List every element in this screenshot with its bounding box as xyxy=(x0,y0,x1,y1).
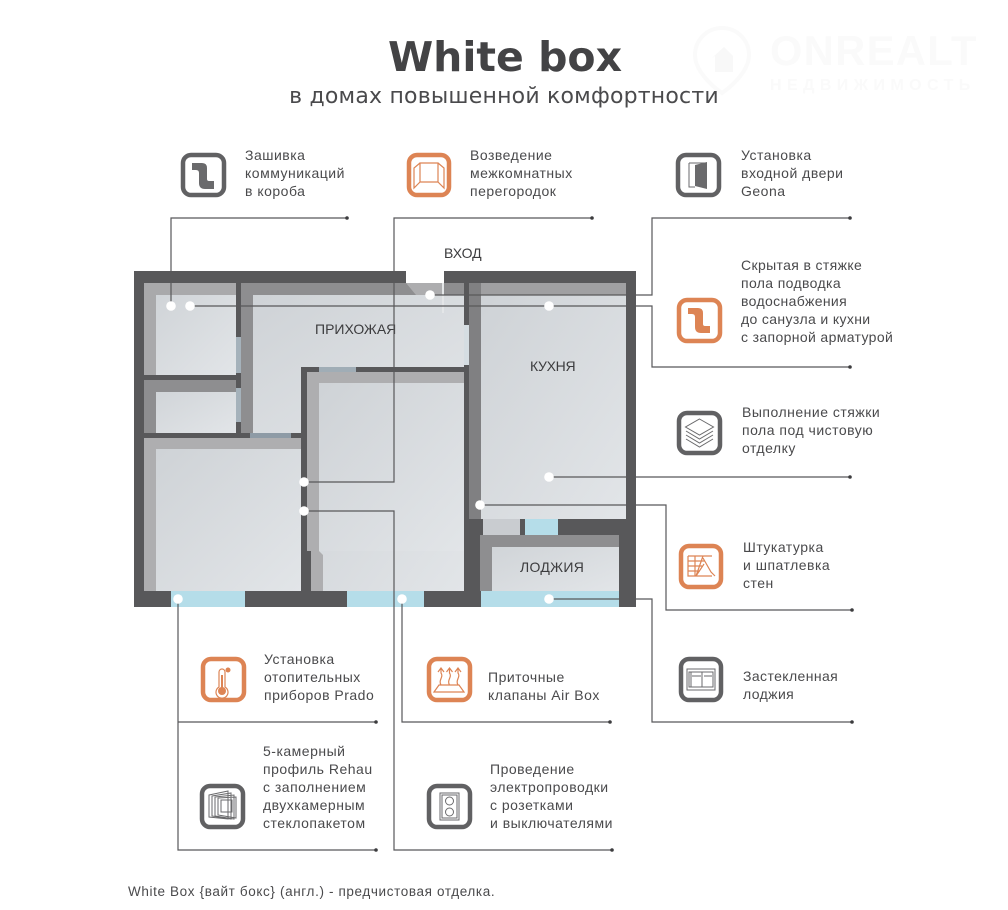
icon: window xyxy=(681,659,721,700)
text: отделку xyxy=(742,440,796,456)
item: water supply xyxy=(679,257,893,345)
text: Приточные xyxy=(488,669,565,685)
icon: socket xyxy=(429,786,470,827)
room: small bathroom xyxy=(144,380,236,433)
room label: hall: ПРИХОЖАЯ xyxy=(315,321,396,337)
text: клапаны Air Box xyxy=(488,687,600,703)
text: лоджия xyxy=(743,686,794,702)
item: boxed utilities xyxy=(183,147,345,199)
icon: plaster trowel xyxy=(681,546,721,587)
text: стен xyxy=(743,575,774,591)
text: Застекленная xyxy=(743,668,838,684)
title: White box xyxy=(388,33,622,81)
item: plaster xyxy=(681,539,830,591)
room label: entrance: ВХОД xyxy=(444,245,482,261)
text: и шпатлевка xyxy=(743,557,830,573)
icon: profile layers xyxy=(202,786,243,827)
text: профиль Rehau xyxy=(263,761,373,777)
text: перегородок xyxy=(470,183,557,199)
item: partitions xyxy=(409,147,573,199)
text: Установка xyxy=(264,651,335,667)
watermark: ONREALT: НЕДВИЖИМОСТЬ xyxy=(770,77,976,94)
watermark: ONREALT xyxy=(695,27,978,94)
icon: door xyxy=(678,155,719,195)
text: 5-камерный xyxy=(263,743,345,759)
item: screed xyxy=(679,404,880,456)
icon: thermometer xyxy=(203,659,244,700)
item: wiring xyxy=(429,761,613,831)
text: Зашивка xyxy=(245,147,305,163)
floor plan xyxy=(134,245,636,607)
text: стеклопакетом xyxy=(263,815,366,831)
room: bedroom xyxy=(144,438,301,591)
item: air valves xyxy=(429,659,600,703)
room label: loggia: ЛОДЖИЯ xyxy=(520,559,584,575)
text: Штукатурка xyxy=(743,539,824,555)
text: приборов Prado xyxy=(264,687,374,703)
text: коммуникаций xyxy=(245,165,345,181)
subtitle: в домах повышенной комфортности xyxy=(289,84,719,109)
room: living room xyxy=(307,372,464,591)
item: window profile xyxy=(202,743,373,831)
text: Установка xyxy=(741,147,812,163)
room label: kitchen: КУХНЯ xyxy=(530,358,575,374)
icon: orange pipe xyxy=(679,300,720,341)
text: Выполнение стяжки xyxy=(742,404,880,420)
footnote: White Box {вайт бокс} (англ.) - предчистовая отделка. xyxy=(128,884,495,899)
text: с розетками xyxy=(490,797,573,813)
text: с заполнением xyxy=(263,779,366,795)
text: Geona xyxy=(741,183,786,199)
room: bathroom xyxy=(144,283,236,375)
text: пола под чистовую xyxy=(742,422,873,438)
text: двухкамерным xyxy=(263,797,365,813)
text: в короба xyxy=(245,183,305,199)
icon: room walls xyxy=(409,155,449,195)
item: entrance door xyxy=(678,147,844,199)
icon: pipe xyxy=(183,155,224,195)
interior doors and glass xyxy=(171,325,619,607)
text: межкомнатных xyxy=(470,165,573,181)
room: loggia xyxy=(480,535,619,591)
text: пола подводка xyxy=(741,275,841,291)
text: Возведение xyxy=(470,147,552,163)
leader lines xyxy=(166,216,854,852)
text: входной двери xyxy=(741,165,844,181)
text: Скрытая в стяжке xyxy=(741,257,862,273)
item: glazed loggia xyxy=(681,659,838,702)
icon: heat arrows xyxy=(429,659,470,700)
text: электропроводки xyxy=(490,779,609,795)
room: kitchen xyxy=(469,283,626,535)
room: entrance hall xyxy=(241,283,464,433)
watermark: ONREALT: ONREALT xyxy=(770,27,978,74)
text: Проведение xyxy=(490,761,575,777)
text: отопительных xyxy=(264,669,361,685)
text: с запорной арматурой xyxy=(741,329,893,345)
outer walls xyxy=(134,271,636,607)
text: водоснабжения xyxy=(741,293,847,309)
text: до санузла и кухни xyxy=(741,311,870,327)
icon: layers xyxy=(679,413,720,453)
text: и выключателями xyxy=(490,815,613,831)
item: heating xyxy=(203,651,374,703)
